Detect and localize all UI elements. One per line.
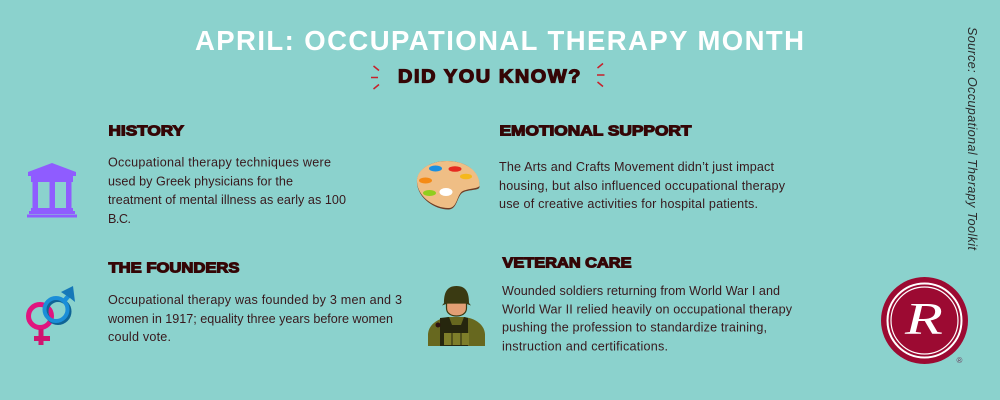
monogram letter: R <box>904 293 943 344</box>
text: history: Occupational therapy techniques were <box>108 156 331 170</box>
panel: the founders <box>107 260 402 344</box>
text: history: treatment of mental illness as early as 100 <box>108 193 346 207</box>
registered mark: ® <box>956 356 962 365</box>
text: the founders: women in 1917; equality three years before women <box>107 312 393 326</box>
title: APRIL: OCCUPATIONAL THERAPY MONTH <box>195 25 804 56</box>
text: veteran care: World War II relied heavily on occupational therapy <box>502 302 793 316</box>
text: emotional support <box>499 160 786 211</box>
icon: gender symbols <box>28 286 75 345</box>
icon: greek temple <box>27 163 77 218</box>
subtitle: DID YOU KNOW? <box>398 65 582 86</box>
text: history <box>108 156 346 226</box>
panel: emotional support <box>499 124 786 211</box>
text: emotional support: use of creative activities for hospital patients. <box>499 197 758 211</box>
icon: soldier <box>428 286 485 346</box>
source note: Source: Occupational Therapy Toolkit <box>965 27 979 251</box>
text: the founders: could vote. <box>108 330 171 344</box>
text: veteran care <box>502 284 793 354</box>
heading: veteran care: VETERAN CARE <box>502 256 632 272</box>
text: history: used by Greek physicians for the <box>108 175 293 189</box>
logo: R seal <box>881 277 968 364</box>
text: veteran care: Wounded soldiers returning from World War I and <box>502 284 780 298</box>
heading: the founders: THE FOUNDERS <box>108 260 240 276</box>
icon: paint palette <box>417 161 480 210</box>
text: veteran care: pushing the profession to standardize training, <box>502 321 767 335</box>
icon: left sparkle <box>371 66 379 89</box>
heading: history: HISTORY <box>108 124 184 140</box>
icon: right sparkle <box>597 64 604 86</box>
text: emotional support: The Arts and Crafts Movement didn’t just impact <box>499 160 774 174</box>
text: veteran care: instruction and certifications. <box>502 340 668 354</box>
panel: veteran care <box>502 256 793 354</box>
text: emotional support: housing, but also influenced occupational therapy <box>499 179 786 193</box>
text: the founders <box>107 293 402 344</box>
text: the founders: Occupational therapy was founded by 3 men and 3 <box>108 293 402 307</box>
heading: emotional support: EMOTIONAL SUPPORT <box>500 124 692 140</box>
text: history: B.C. <box>108 212 131 226</box>
panel: history <box>108 124 346 226</box>
